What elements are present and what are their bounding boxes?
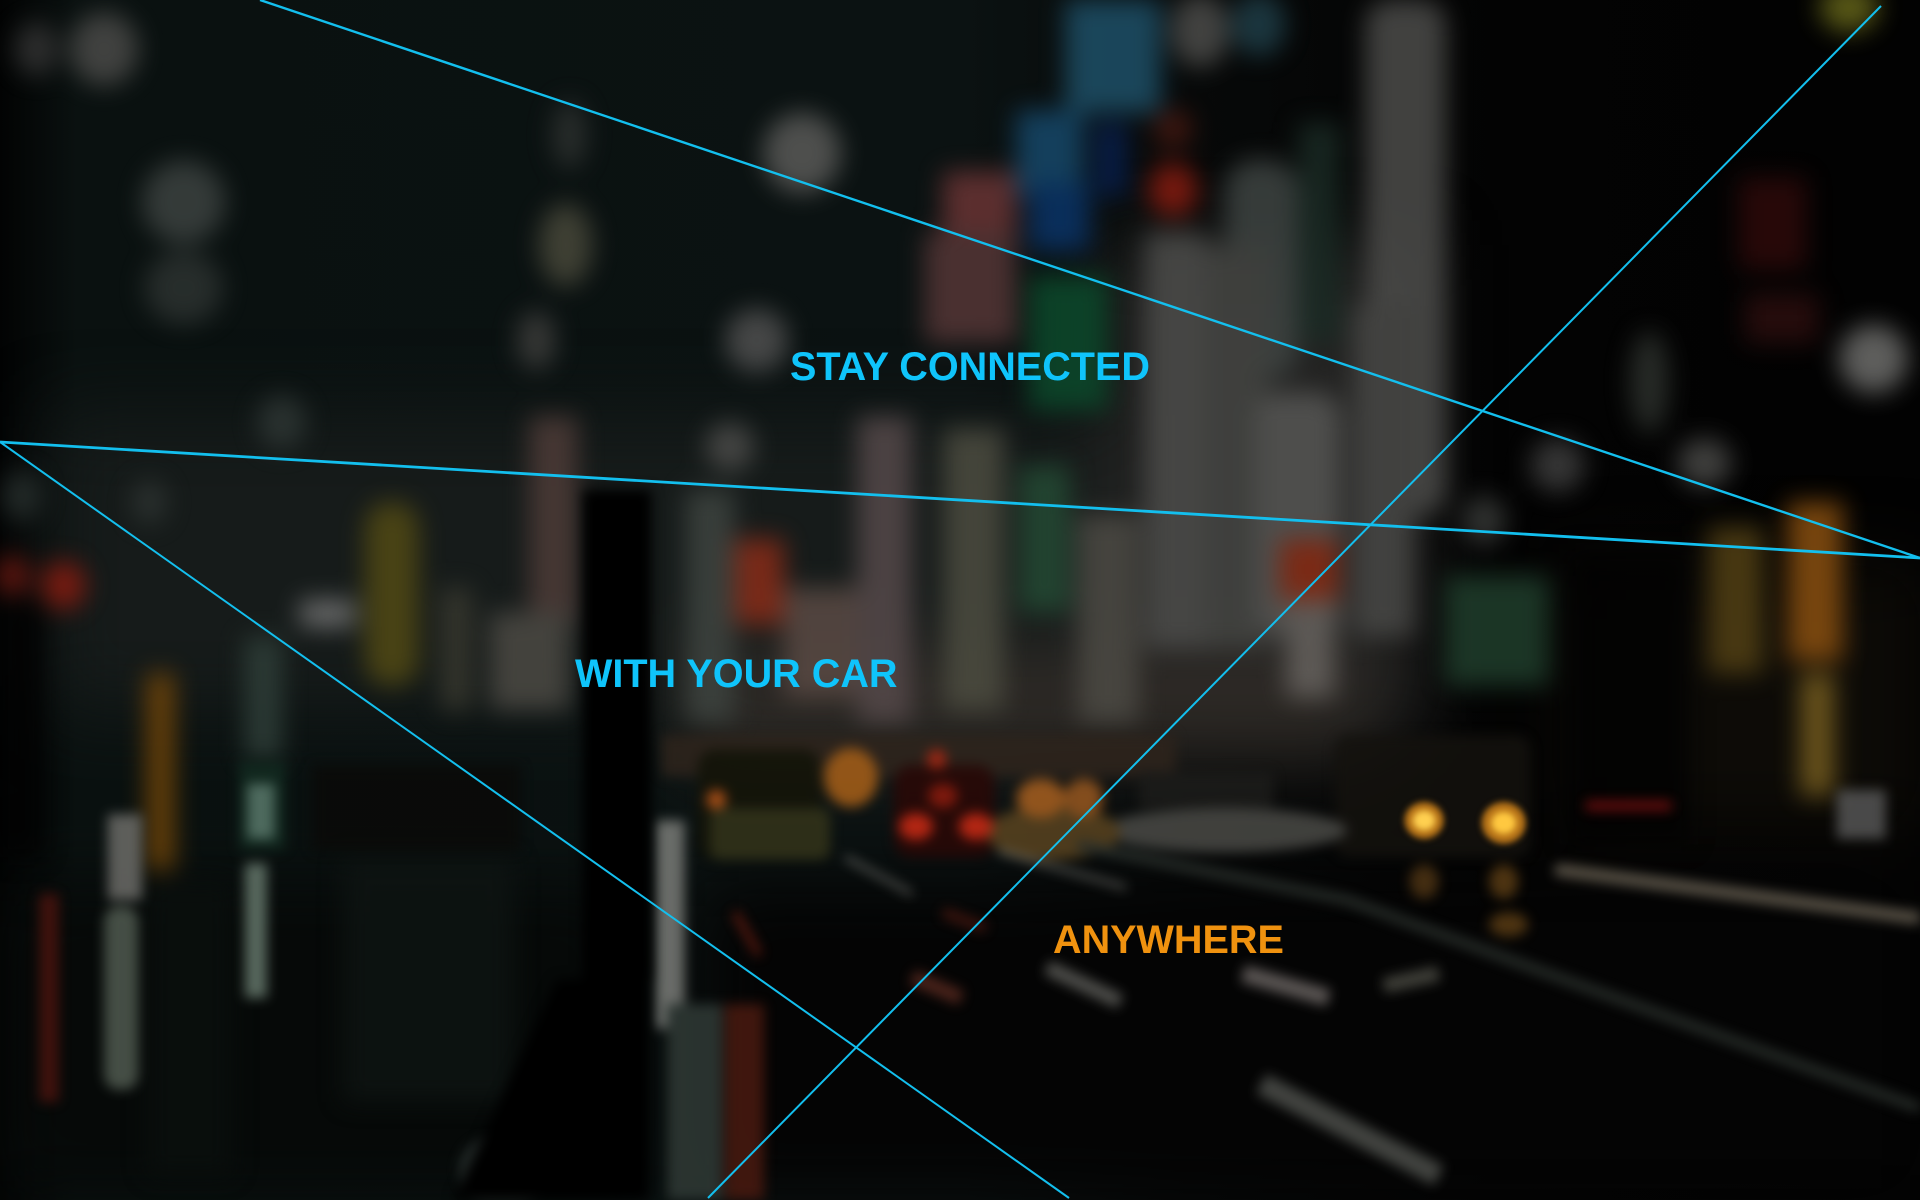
line: top-left to right edge <box>260 0 1920 558</box>
heading: with your car: WITH YOUR CAR <box>575 652 897 696</box>
line: left edge to right edge <box>0 442 1920 558</box>
line: top-right to bottom <box>708 6 1881 1198</box>
line: left edge to bottom <box>0 442 1069 1198</box>
heading: stay connected: STAY CONNECTED <box>790 345 1150 389</box>
heading: anywhere: ANYWHERE <box>1053 918 1284 962</box>
